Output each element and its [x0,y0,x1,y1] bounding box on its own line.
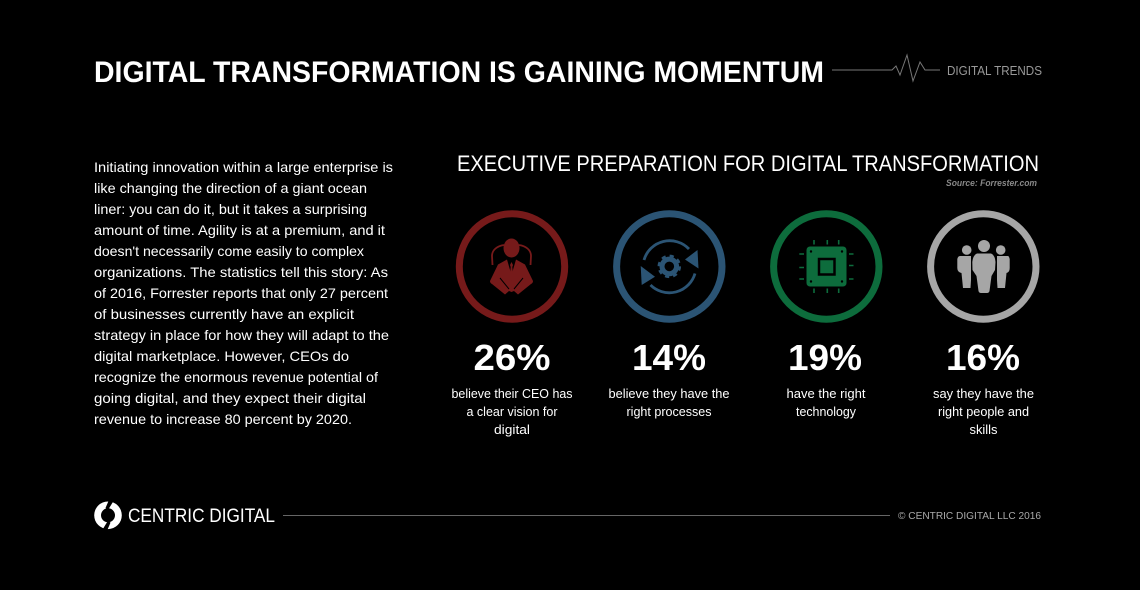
title: DIGITAL TRANSFORMATION IS GAINING MOMENTUM [94,56,824,89]
intro paragraph: doesn't necessarily come easily to complex [94,243,364,259]
description: digital [494,423,530,437]
description [933,387,1034,437]
description: right processes [626,405,712,419]
intro paragraph: of 2016, Forrester reports that only 27 percent [94,285,388,301]
description: technology [796,405,857,419]
intro paragraph: strategy in place for how they will adapt to the [94,327,389,343]
intro paragraph: going digital, and they expect their digital [94,390,366,406]
value: 19% [788,337,862,378]
description: have the right [786,387,866,401]
chart heading: EXECUTIVE PREPARATION FOR DIGITAL TRANSFORMATION [457,151,1039,176]
intro paragraph: amount of time. Agility is at a premium, and it [94,222,385,238]
section tag: DIGITAL TRENDS [947,64,1042,78]
intro paragraph: digital marketplace. However, CEOs do [94,348,349,364]
description [452,387,572,437]
description: believe their CEO has [452,387,572,401]
icon: chip [799,240,854,293]
source note: Source: Forrester.com [946,178,1037,189]
intro paragraph [94,159,393,427]
value: 16% [946,337,1020,378]
value: 26% [474,337,550,378]
description: skills [970,423,998,437]
red ring [459,214,565,319]
intro paragraph: organizations. The statistics tell this story: As [94,264,388,280]
description: a clear vision for [466,405,558,419]
description: say they have the [933,387,1034,401]
value: 14% [632,337,706,378]
footer rule [283,514,890,516]
logo wordmark: CENTRIC DIGITAL [128,506,275,527]
icon: three people [957,240,1010,293]
heartbeat line [832,55,940,81]
logo mark [94,501,122,530]
icon: executive [490,238,533,294]
intro paragraph: like changing the direction of a giant ocean [94,180,367,196]
description [608,387,730,419]
copyright: © CENTRIC DIGITAL LLC 2016 [898,510,1041,522]
green ring [774,214,879,319]
blue ring [617,214,722,319]
intro paragraph: Initiating innovation within a large enterprise is [94,159,393,175]
intro paragraph: recognize the enormous revenue potential of [94,369,378,385]
grey ring [931,214,1036,319]
stat: technology [774,214,879,419]
stat: CEO vision [452,214,572,437]
intro paragraph: liner: you can do it, but it takes a surprising [94,201,367,217]
description: right people and [938,405,1029,419]
description [786,387,866,419]
description: believe they have the [608,387,730,401]
stat: people [931,214,1036,437]
intro paragraph: of businesses currently have an explicit [94,306,354,322]
icon: gear with cycle arrows [641,241,698,293]
footer logo [94,501,275,530]
intro paragraph: revenue to increase 80 percent by 2020. [94,411,352,427]
stat: processes [608,214,730,419]
